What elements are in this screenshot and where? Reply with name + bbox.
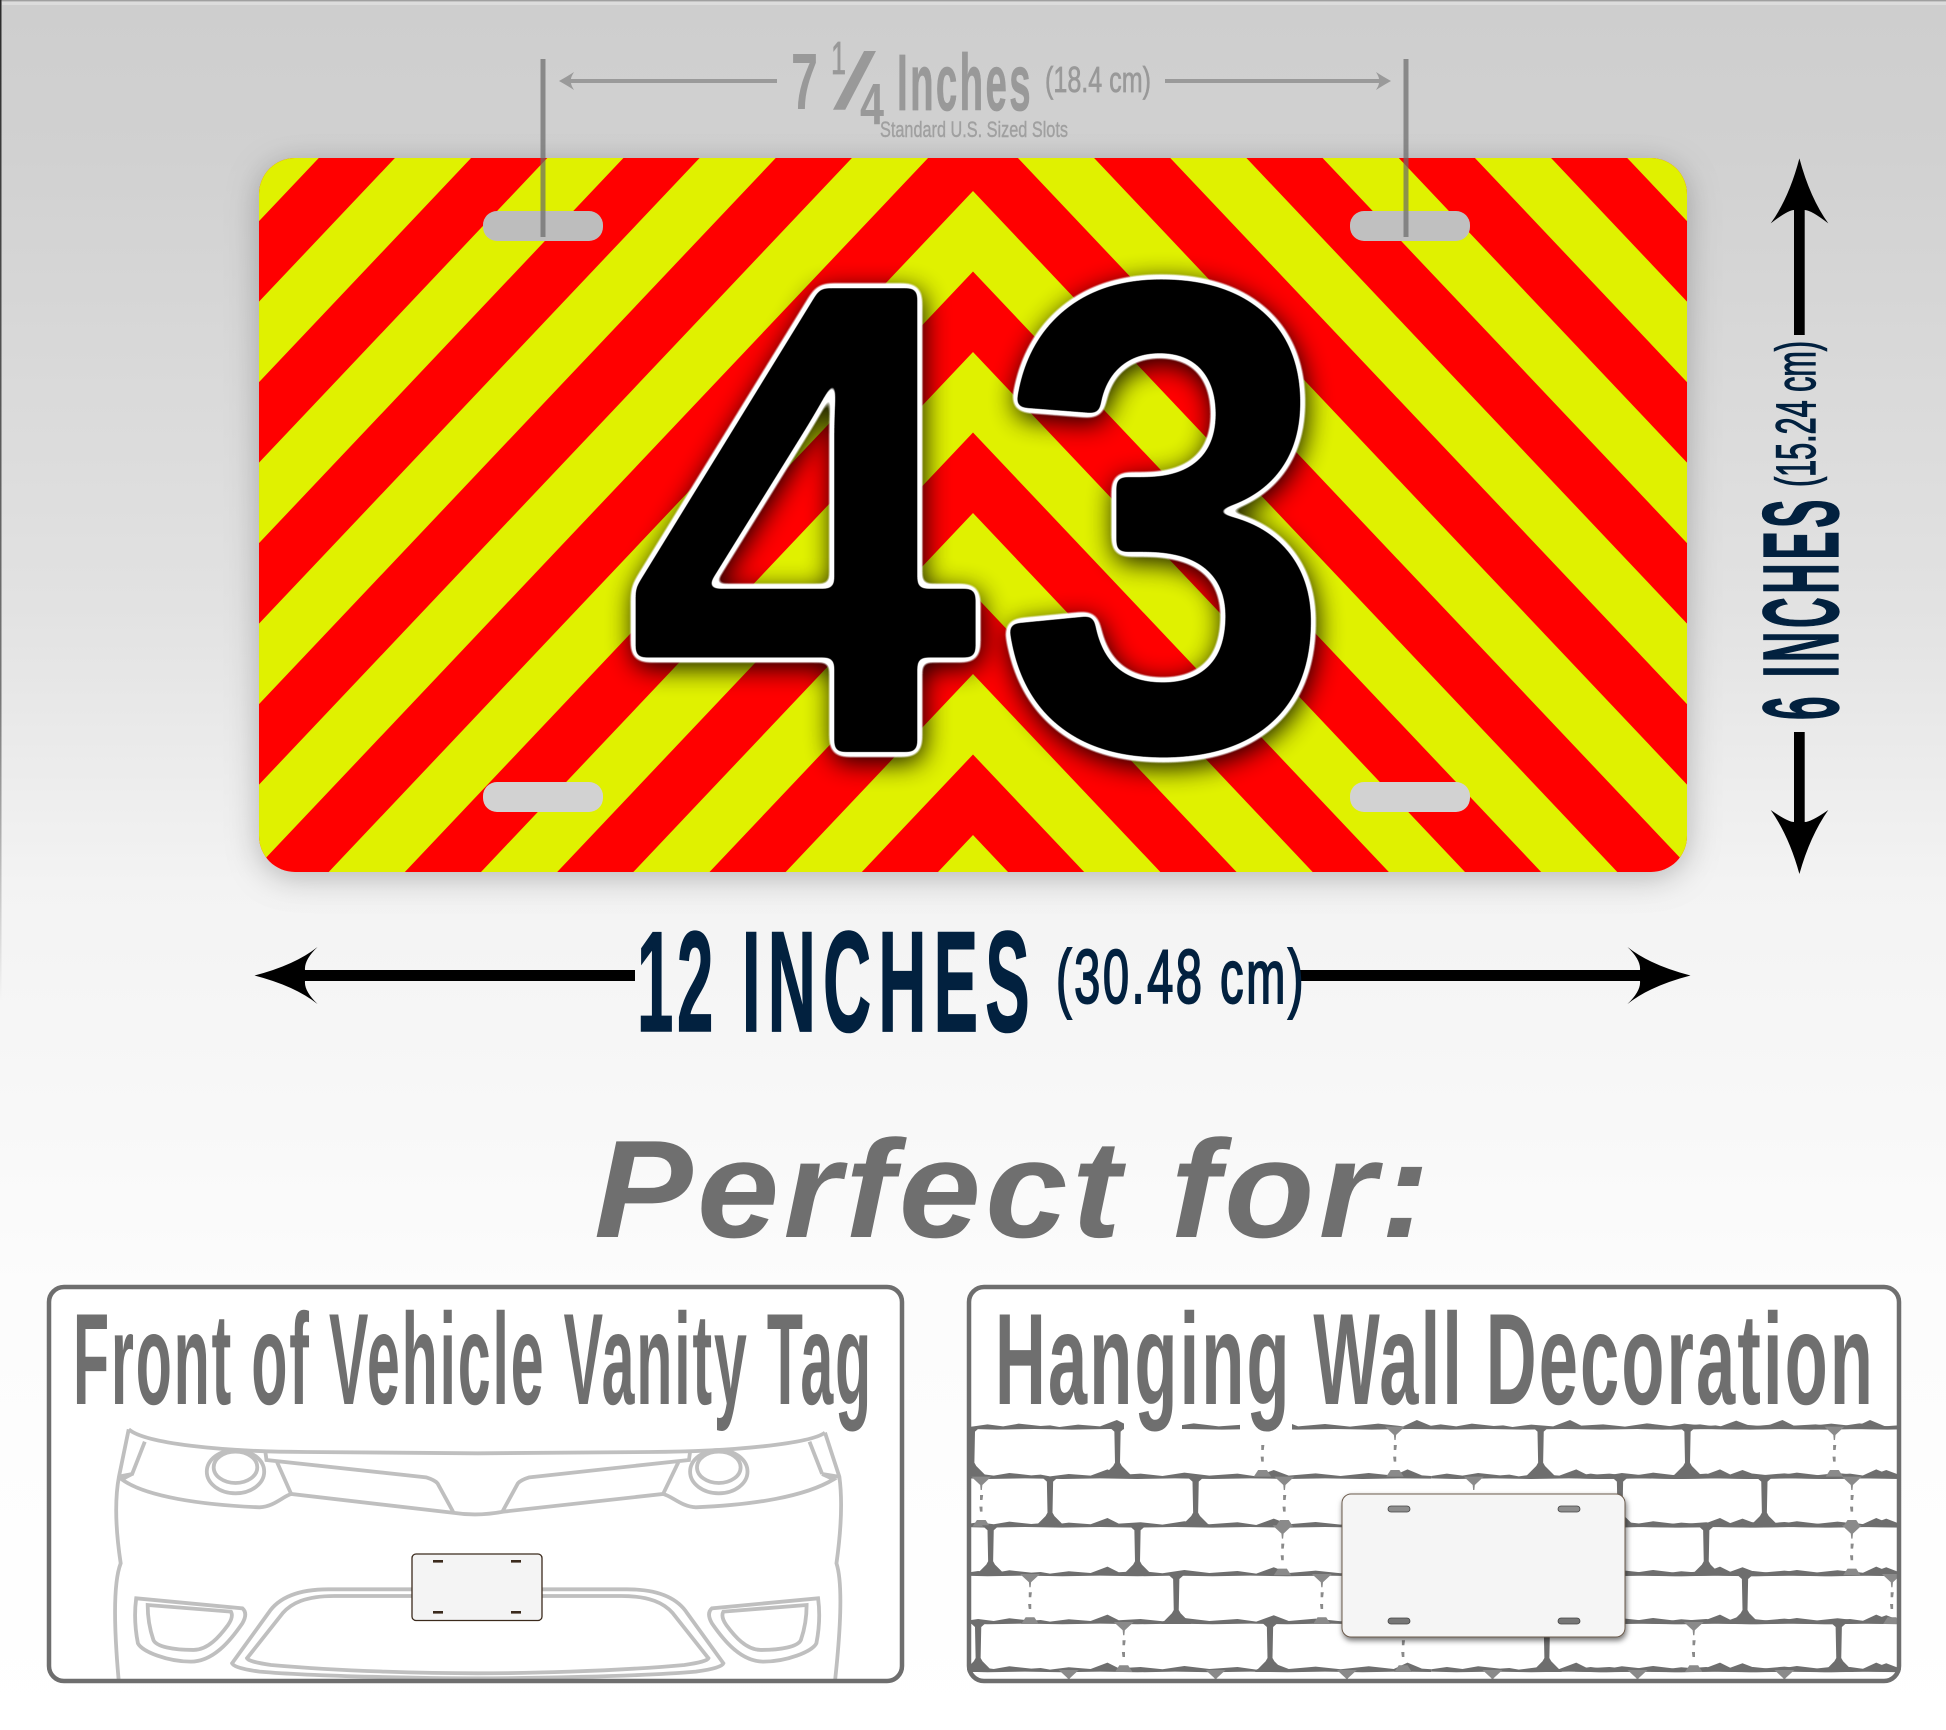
panel background [969,1287,1899,1681]
number 43: 4 [626,142,983,895]
heading: Perfect for: Perfect for: [594,1112,1434,1267]
number 43 [626,140,1333,895]
grey arrow right [1165,72,1391,90]
panel background [49,1287,902,1681]
grey arrow left [559,72,777,90]
right slot guide line [1404,59,1408,237]
slot spacing label: 4 [860,72,884,137]
width dimension [254,903,1690,1062]
slot spacing label: 7 [791,37,818,126]
arrow up [1771,158,1828,335]
mounting slots [483,211,1470,812]
slot spacing label: (18.4 cm) [1045,59,1151,100]
slot spacing label: Standard U.S. Sized Slots [880,117,1068,142]
width label: 12 [637,903,717,1062]
panel border [49,1287,902,1681]
chevron stripes [259,158,1687,872]
car front line drawing [115,1429,841,1683]
width label: INCHES [742,903,1037,1062]
height dimension [1740,158,1861,874]
plate base [259,158,1687,872]
arrow down [1771,732,1828,874]
text: Front of Vehicle Vanity Tag [73,1286,873,1432]
brick wall [957,1415,1946,1720]
number 43: 3 [995,140,1333,893]
slot spacing dimension [543,32,1406,237]
wall-mounted plate [1342,1494,1625,1637]
panel: hanging wall decoration [966,1284,1902,1684]
mini plate on bumper [412,1554,542,1620]
height label: 6 INCHES [1740,496,1861,720]
height label: (15.24 cm) [1764,341,1827,487]
slot spacing label [791,32,1151,142]
panel border [969,1287,1899,1681]
width label: (30.48 cm) [1056,935,1306,1020]
panel: front of vehicle vanity tag [49,1286,902,1683]
slot spacing label: Inches [897,38,1033,127]
left slot guide line [540,59,546,237]
arrow right [1300,947,1690,1004]
arrow left [254,947,635,1004]
license plate [242,148,1704,896]
height label [1740,341,1861,720]
slot spacing label: 1 [831,32,846,84]
slot spacing label: / [833,37,877,126]
